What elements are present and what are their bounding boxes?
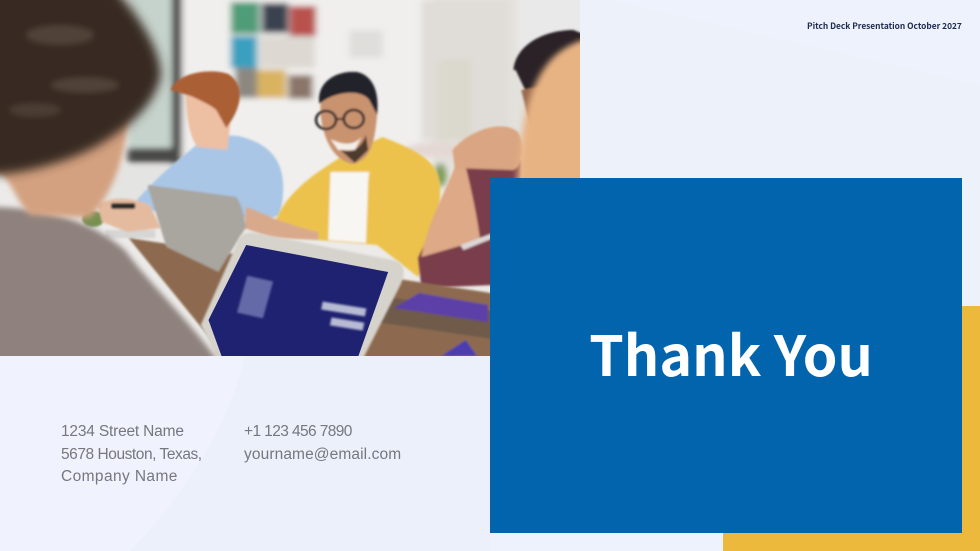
person in yellow jacket [244, 72, 440, 277]
contact text [244, 423, 401, 462]
table [128, 236, 490, 356]
header note: Pitch Deck Presentation October 2027 [807, 20, 962, 32]
person in blue shirt [82, 71, 283, 238]
laptop: silver, rear [147, 185, 246, 272]
photo: team meeting around a table [0, 0, 580, 356]
contact text: +1 123 456 7890 [244, 423, 352, 440]
accent block: yellow [723, 306, 980, 551]
person in maroon sweater with hands clasped [418, 30, 599, 288]
office wall [0, 142, 490, 356]
person with blonde hair [512, 36, 580, 178]
panel: blue Thank You card [490, 178, 962, 533]
window [128, 0, 174, 150]
address text: Company Name [61, 468, 178, 485]
laptop: blue screen, front [201, 233, 404, 366]
foreground person: curly hair and grey top [0, 0, 224, 370]
address text [61, 423, 202, 485]
address text: 1234 Street Name [61, 423, 184, 440]
heading: Thank You: Thank You [589, 312, 873, 392]
flowers and plant [408, 141, 453, 158]
contact text: yourname@email.com [244, 446, 401, 462]
address text: 5678 Houston, Texas, [61, 446, 202, 462]
posters [231, 2, 260, 34]
